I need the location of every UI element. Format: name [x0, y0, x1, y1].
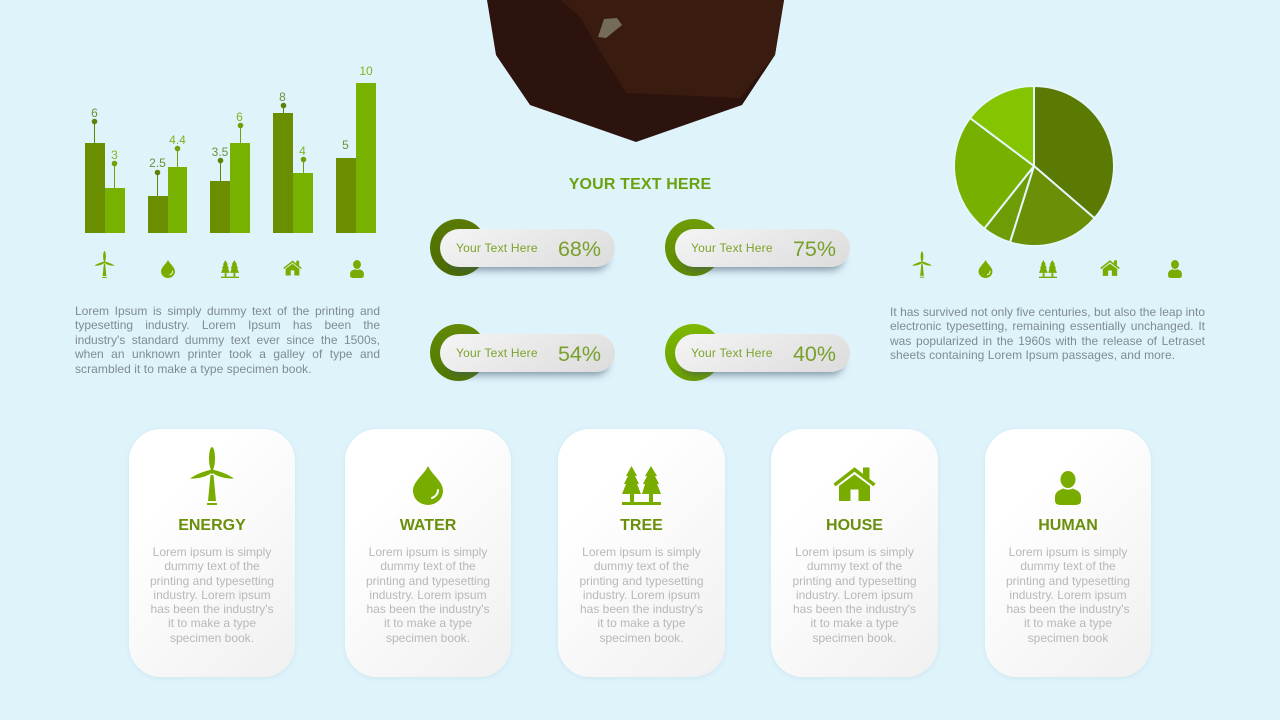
icon: person [1055, 471, 1081, 505]
card: energy: dummy text of the [164, 559, 260, 573]
left icon row [94, 251, 364, 278]
card: human: Lorem ipsum is simply [1009, 545, 1127, 559]
card: house [771, 429, 938, 677]
right icon row [912, 251, 1182, 278]
card: energy: ENERGY [178, 517, 246, 534]
bar chart: 8 [279, 90, 286, 104]
card: energy: Lorem ipsum is simply [153, 545, 271, 559]
card: house: Lorem ipsum is simply [795, 545, 914, 559]
left paragraph: when an unknown printer took a galley of type and [75, 347, 380, 361]
card: human: HUMAN [1038, 517, 1098, 534]
icon: trees [622, 466, 661, 505]
card: water: Lorem ipsum is simply [369, 545, 487, 559]
card: water: it to make a type [384, 616, 472, 630]
bar chart: 5 [342, 138, 349, 152]
left paragraph: Lorem Ipsum is simply dummy text of the printing and [75, 304, 380, 318]
pie chart [955, 87, 1113, 245]
card: energy: printing and typesetting [150, 574, 274, 588]
card: tree: it to make a type [597, 616, 686, 630]
stat: 40% [665, 324, 850, 381]
right paragraph: sheets containing Lorem Ipsum passages, and more. [890, 348, 1175, 362]
card: water: specimen book. [386, 631, 470, 645]
card: human: it to make a type [1024, 616, 1112, 630]
left paragraph: industry's standard dummy text ever since the 1500s, [75, 333, 380, 347]
stat: 54%: 54% [558, 342, 601, 366]
bar chart: 2.5 [149, 156, 166, 170]
card: tree: TREE [620, 517, 663, 534]
bar chart: 10 [359, 64, 373, 78]
card: human [985, 429, 1151, 677]
card: tree: has been the industry's [580, 602, 703, 616]
card: tree: Lorem ipsum is simply [582, 545, 701, 559]
card: tree [558, 429, 725, 677]
card: water [345, 429, 511, 677]
card: water: has been the industry's [366, 602, 490, 616]
stat: 68%: 68% [558, 237, 601, 261]
card: human: printing and typesetting [1006, 574, 1130, 588]
stat: 40%: 40% [793, 342, 836, 366]
stat: 54%: Your Text Here [456, 346, 538, 360]
right paragraph: was popularized in the 1960s with the release of Letraset [890, 334, 1205, 348]
bar chart: 4 [299, 144, 306, 158]
stat: 75%: Your Text Here [691, 240, 773, 254]
card: energy: specimen book. [170, 631, 254, 645]
card: energy: it to make a type [168, 616, 256, 630]
card: tree: industry. Lorem ipsum [583, 588, 700, 602]
stat: 68%: Your Text Here [456, 240, 538, 254]
card: house: industry. Lorem ipsum [796, 588, 913, 602]
card: water: dummy text of the [380, 559, 476, 573]
left paragraph: typesetting industry. Lorem Ipsum has been the [75, 318, 380, 332]
card: energy: industry. Lorem ipsum [153, 588, 271, 602]
bar chart: 6 [91, 106, 98, 120]
card: energy: has been the industry's [150, 602, 274, 616]
stat: 68% [430, 219, 615, 276]
bar chart: 4.4 [169, 133, 186, 147]
bar chart: 3.5 [212, 145, 229, 159]
icon: water drop [413, 466, 443, 505]
card: water: industry. Lorem ipsum [369, 588, 487, 602]
right paragraph: electronic typesetting, remaining essentially unchanged. It [890, 319, 1205, 333]
card: house: dummy text of the [807, 559, 902, 573]
card: house: HOUSE [826, 517, 883, 534]
card: house: specimen book. [812, 631, 897, 645]
card: house: printing and typesetting [792, 574, 917, 588]
card: human: industry. Lorem ipsum [1009, 588, 1127, 602]
stat: 54% [430, 324, 615, 381]
card: water: WATER [400, 517, 456, 534]
stat: 40%: Your Text Here [691, 346, 773, 360]
rock illustration [487, 0, 784, 142]
card: water: printing and typesetting [366, 574, 490, 588]
stat: 75% [665, 219, 850, 276]
card: house: has been the industry's [793, 602, 916, 616]
card: tree: dummy text of the [594, 559, 689, 573]
card: human: has been the industry's [1006, 602, 1130, 616]
card: energy [129, 429, 295, 677]
left paragraph: scrambled it to make a type specimen book. [75, 362, 312, 376]
card: tree: printing and typesetting [579, 574, 704, 588]
icon: wind turbine [190, 447, 234, 505]
left paragraph [75, 304, 380, 376]
card: house: it to make a type [810, 616, 899, 630]
center heading: YOUR TEXT HERE [569, 176, 711, 193]
right paragraph: It has survived not only five centuries, but also the leap into [890, 305, 1205, 319]
right paragraph [890, 305, 1205, 362]
bar chart: 6 [236, 110, 243, 124]
bar chart: 3 [111, 148, 118, 162]
card: human: dummy text of the [1020, 559, 1116, 573]
card: human: specimen book [1028, 631, 1108, 645]
stat: 75%: 75% [793, 237, 836, 261]
card: tree: specimen book. [599, 631, 684, 645]
icon: house [834, 467, 876, 501]
bar chart [85, 64, 376, 233]
